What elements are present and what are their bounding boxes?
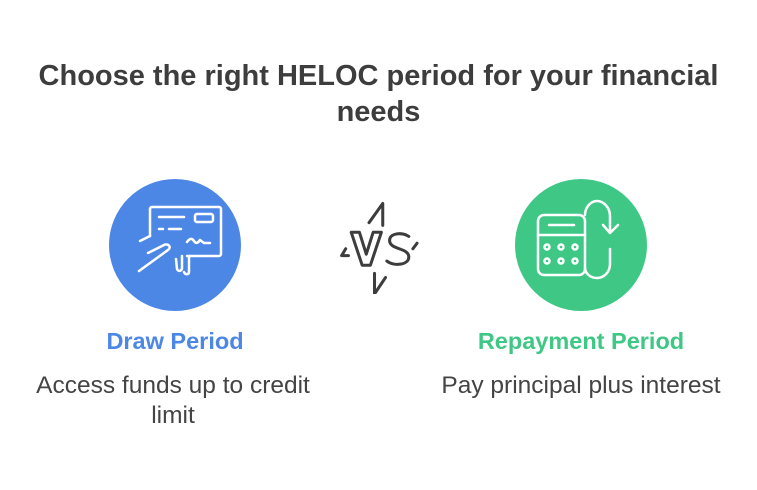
title: needs <box>337 96 420 128</box>
heading: draw period: Draw Period <box>106 328 244 354</box>
icon: draw period credit card <box>109 179 241 311</box>
icon: repayment calculator <box>515 179 647 311</box>
heading: repayment period: Repayment Period <box>478 328 684 354</box>
text: draw period: limit <box>151 402 195 429</box>
text: repayment period: Pay principal plus interest <box>441 372 721 399</box>
text: draw period: Access funds up to credit <box>36 372 310 399</box>
title <box>39 60 718 128</box>
icon: VS <box>340 202 419 294</box>
text: draw period <box>36 372 310 429</box>
title: Choose the right HELOC period for your financial <box>39 60 718 92</box>
